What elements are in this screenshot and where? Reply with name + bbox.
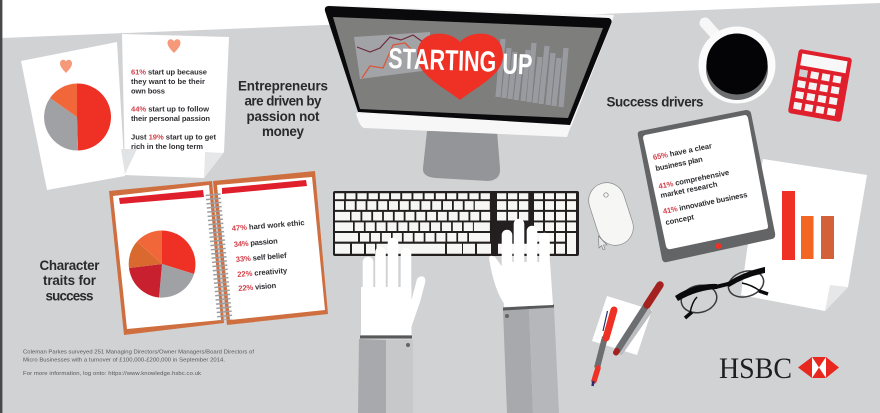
text: character trait stats	[231, 218, 305, 293]
bar chart	[782, 191, 834, 260]
left arm	[358, 243, 425, 413]
coffee cup	[698, 23, 776, 104]
heading: success drivers: Success drivers	[606, 94, 704, 110]
tablet	[638, 110, 775, 262]
notebook spiral	[213, 194, 225, 320]
text: success driver stats: business plan	[655, 154, 704, 173]
text: success driver stats: 65% have a clear	[652, 141, 713, 162]
footnote: Coleman Parkes surveyed 251 Managing Directors/Owner Managers/Board Directors of	[23, 350, 254, 356]
pie chart: motivations	[44, 83, 111, 151]
icon: cursor	[598, 236, 607, 250]
monitor	[325, 5, 614, 181]
icon: small heart	[60, 60, 72, 73]
pie chart: character traits	[129, 230, 195, 298]
heading: entrepreneurs: Entrepreneurs	[238, 78, 328, 94]
text: motivation stats: 44% start up to follow	[131, 104, 209, 114]
text: motivation stats: rich in the long term	[131, 142, 203, 151]
footnote	[23, 350, 254, 377]
right sleeve	[503, 304, 559, 413]
heading: character traits	[40, 258, 100, 304]
left sleeve	[358, 336, 413, 413]
panel: entrepreneur statistics paper	[121, 34, 229, 178]
text: success driver stats: concept	[665, 212, 695, 227]
HSBC logo: HSBC	[719, 352, 792, 385]
pen: red cap	[592, 310, 614, 386]
text: character trait stats: 33% self belief	[235, 251, 287, 264]
mouse	[584, 178, 638, 250]
notebook left page	[109, 181, 224, 335]
keyboard	[333, 191, 579, 256]
text: motivation stats: 61% start up because	[131, 68, 207, 76]
notebook	[109, 171, 328, 335]
panel: entrepreneur pie paper	[21, 42, 125, 190]
pen: dark red cap	[616, 285, 660, 352]
panel: bar chart paper	[741, 159, 867, 311]
left hand	[361, 243, 425, 335]
monitor screen	[333, 17, 603, 118]
heading: entrepreneurs: are driven by	[244, 94, 322, 108]
footnote: For more information, log onto: https://www.knowledge.hsbc.co.uk	[23, 371, 201, 377]
heading: entrepreneurs: money	[262, 124, 305, 139]
footnote: Micro Businesses with a turnover of £100,000-£200,000 in September 2014.	[23, 358, 225, 364]
heading: entrepreneurs	[238, 78, 328, 139]
note paper with pens	[592, 285, 660, 386]
monitor stand	[423, 131, 500, 181]
heading: entrepreneurs: passion not	[246, 109, 320, 124]
heading: character traits: traits for	[43, 273, 97, 288]
notebook right page	[213, 171, 328, 325]
icon: large heart	[168, 39, 180, 53]
screen bar chart	[498, 39, 566, 107]
right arm	[489, 224, 559, 413]
text: character trait stats: 22% creativity	[237, 266, 288, 279]
heading: character traits: success	[46, 288, 94, 304]
title: UP	[502, 49, 533, 82]
text: motivation stats: they want to be their	[131, 77, 205, 86]
text: success driver stats: market research	[660, 180, 719, 200]
text: motivation stats: their personal passion	[131, 114, 210, 123]
text: motivation stats	[131, 68, 216, 151]
text: character trait stats: 22% vision	[238, 281, 277, 293]
heading: character traits: Character	[40, 258, 100, 273]
text: success driver stats: 41% comprehensive	[658, 168, 730, 191]
screen line chart	[354, 32, 430, 79]
title: STARTING	[388, 43, 497, 79]
icon: hexagon	[798, 357, 839, 378]
text: success driver stats	[652, 141, 748, 227]
HSBC logo	[719, 352, 839, 385]
text: character trait stats: 34% passion	[233, 236, 278, 249]
right hand	[489, 224, 553, 307]
text: success driver stats: 41% innovative business	[662, 190, 748, 216]
text: motivation stats: own boss	[131, 86, 165, 96]
heart	[417, 34, 503, 100]
text: motivation stats: Just 19% start up to get	[131, 132, 216, 142]
calculator	[788, 49, 852, 122]
glasses	[675, 267, 768, 318]
text: character trait stats: 47% hard work ethic	[231, 218, 305, 233]
